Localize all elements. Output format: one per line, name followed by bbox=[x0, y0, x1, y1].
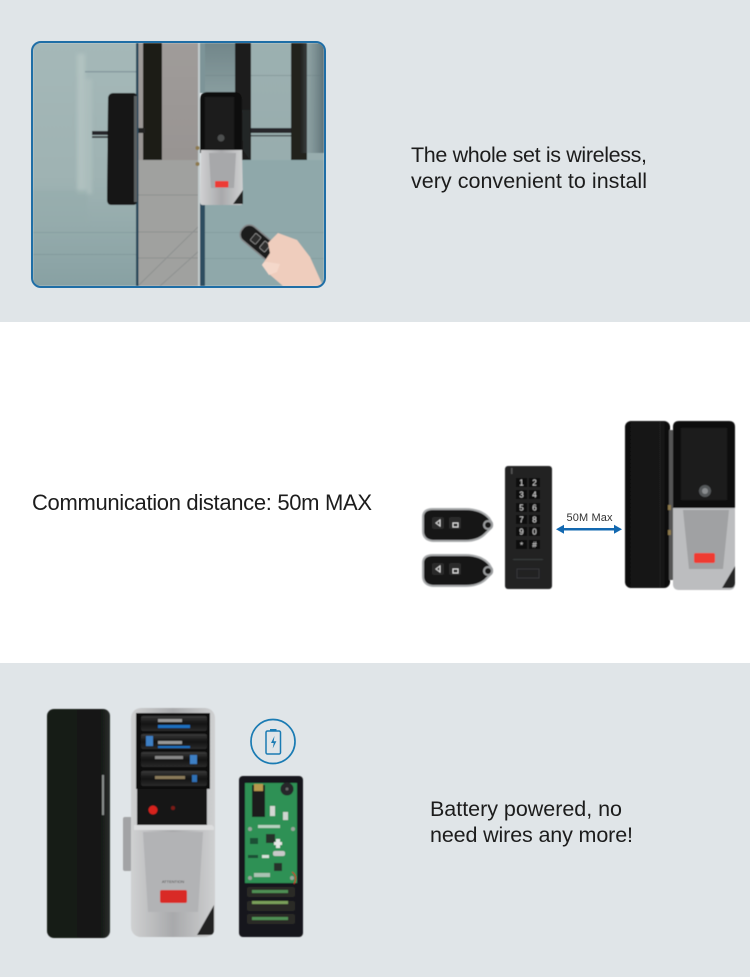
panel: battery powered bbox=[0, 663, 750, 977]
icon: remote fob top bbox=[423, 509, 492, 541]
text: battery powered: need wires any more! bbox=[430, 823, 633, 847]
icon: keypad: * bbox=[520, 541, 523, 550]
arrow: two-way 50M range bbox=[556, 512, 622, 534]
icon: lock front view bbox=[625, 421, 735, 590]
icon: keypad: 8 bbox=[532, 516, 537, 524]
panel: wireless installation bbox=[0, 0, 750, 322]
photo: lock mounted on glass door bbox=[32, 42, 325, 287]
icon: keypad: 4 bbox=[532, 490, 537, 500]
icon: remote fob bottom bbox=[423, 555, 492, 586]
icon: lock body with batteries bbox=[123, 708, 215, 937]
text: battery powered bbox=[430, 797, 633, 847]
icon: keypad: 2 bbox=[532, 478, 537, 488]
icon: keypad: 6 bbox=[532, 504, 537, 512]
text: communication distance: Communication distance: 50m MAX bbox=[32, 490, 372, 515]
icon: keypad: 1 bbox=[519, 478, 524, 488]
icon: keypad: 3 bbox=[519, 490, 524, 500]
icon: black cover bbox=[47, 709, 110, 938]
icon: keypad bbox=[505, 466, 552, 589]
icon: circuit board in case bbox=[239, 776, 303, 937]
panel: communication distance bbox=[0, 322, 750, 663]
text: battery powered: Battery powered, no bbox=[430, 797, 622, 821]
icon: battery in circle bbox=[251, 720, 295, 764]
icon: keypad: 7 bbox=[519, 516, 524, 524]
hand bbox=[262, 233, 323, 286]
text: wireless install bbox=[411, 143, 647, 193]
remote bbox=[239, 224, 271, 260]
text: wireless install: The whole set is wireless, bbox=[411, 143, 647, 167]
arrow: two-way 50M range: 50M Max bbox=[566, 512, 613, 524]
icon: lock body with batteries: ATTENTION bbox=[162, 879, 184, 884]
text: wireless install: very convenient to install bbox=[411, 169, 647, 193]
icon: keypad: 0 bbox=[532, 528, 537, 536]
left handle bbox=[107, 93, 137, 205]
right lock bbox=[200, 92, 242, 153]
icon: keypad: 5 bbox=[519, 504, 524, 512]
icon: keypad: 9 bbox=[519, 528, 524, 536]
icon: keypad: # bbox=[532, 540, 537, 550]
